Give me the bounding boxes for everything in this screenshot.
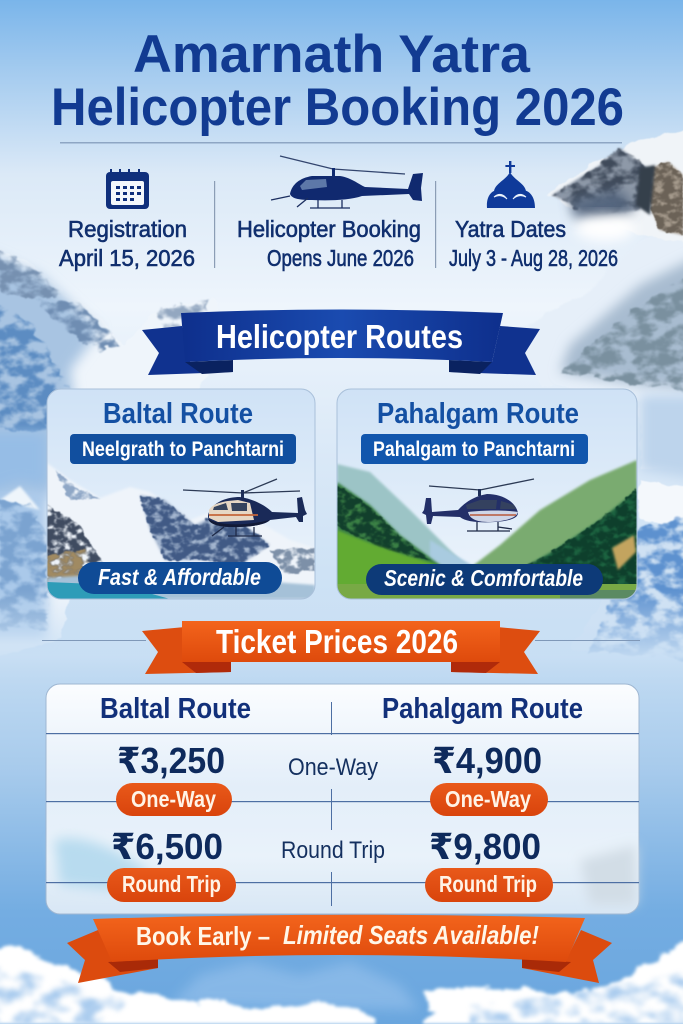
card 2 route label [361,434,588,464]
ticket prices [111,740,542,867]
price pills [107,783,553,902]
info row [59,156,618,271]
card 1 helicopter [183,479,307,536]
icon: helicopter [271,156,423,208]
title: Amarnath Yatra [133,25,531,84]
title: Helicopter Booking 2026 [51,78,624,137]
middle row labels: One-Way [288,754,378,781]
banner text: Book Early – [136,921,270,951]
ticket prices: ₹9,800 [429,826,541,867]
price pills: Round Trip [122,871,221,897]
background: left mountains [0,240,228,660]
card 1 mountain scene [47,463,315,599]
card 2 valley scene [337,460,637,599]
table column headers [100,693,583,725]
panel: ticket price table [46,684,639,914]
table column headers: Baltal Route [100,693,251,725]
yatra dates text [449,216,618,271]
background: right mountains [510,128,683,660]
table sky texture [54,838,636,905]
banner: helicopter routes [142,310,540,375]
card 2 heading: Pahalgam Route [377,398,579,430]
table grid lines [46,702,639,906]
title [51,25,624,137]
banner: book early [67,915,612,983]
middle row labels [281,754,385,864]
yatra dates text: Yatra Dates [455,216,566,242]
card 2 helicopter [422,479,534,531]
middle row labels: Round Trip [281,837,385,864]
yatra dates text: July 3 - Aug 28, 2026 [449,245,618,271]
ticket prices: ₹3,250 [117,740,225,781]
booking text: Opens June 2026 [267,245,414,271]
booking text [237,216,421,271]
card 2 tag: Scenic & Comfortable [384,565,583,591]
banner: ticket prices: Ticket Prices 2026 [216,623,458,660]
banner: helicopter routes: Helicopter Routes [216,318,463,355]
mist band [0,590,683,700]
distant peak behind clouds [170,962,420,1010]
ticket prices: ₹6,500 [111,826,223,867]
banner text [136,920,539,951]
price pills: Round Trip [439,871,537,897]
card 1 route label: Neelgrath to Panchtarni [82,438,284,461]
registration text [59,216,195,271]
ticket prices: ₹4,900 [432,740,542,781]
card 1 heading: Baltal Route [103,398,253,430]
table column headers: Pahalgam Route [382,693,583,725]
card 2 route label: Pahalgam to Panchtarni [373,438,575,461]
registration text: Registration [68,216,187,242]
icon: temple [487,161,535,208]
card 1 tag: Fast & Affordable [98,564,261,590]
card 1 route label [70,434,296,464]
panel: baltal route [47,389,315,599]
price pills: One-Way [445,786,531,812]
banner text: Limited Seats Available! [283,920,539,950]
icon: calendar [106,169,149,209]
banner: ticket prices [142,621,540,674]
price pills: One-Way [131,786,216,812]
registration text: April 15, 2026 [59,245,195,271]
panel: pahalgam route [337,389,637,599]
clouds [0,925,683,1024]
booking text: Helicopter Booking [237,216,421,242]
